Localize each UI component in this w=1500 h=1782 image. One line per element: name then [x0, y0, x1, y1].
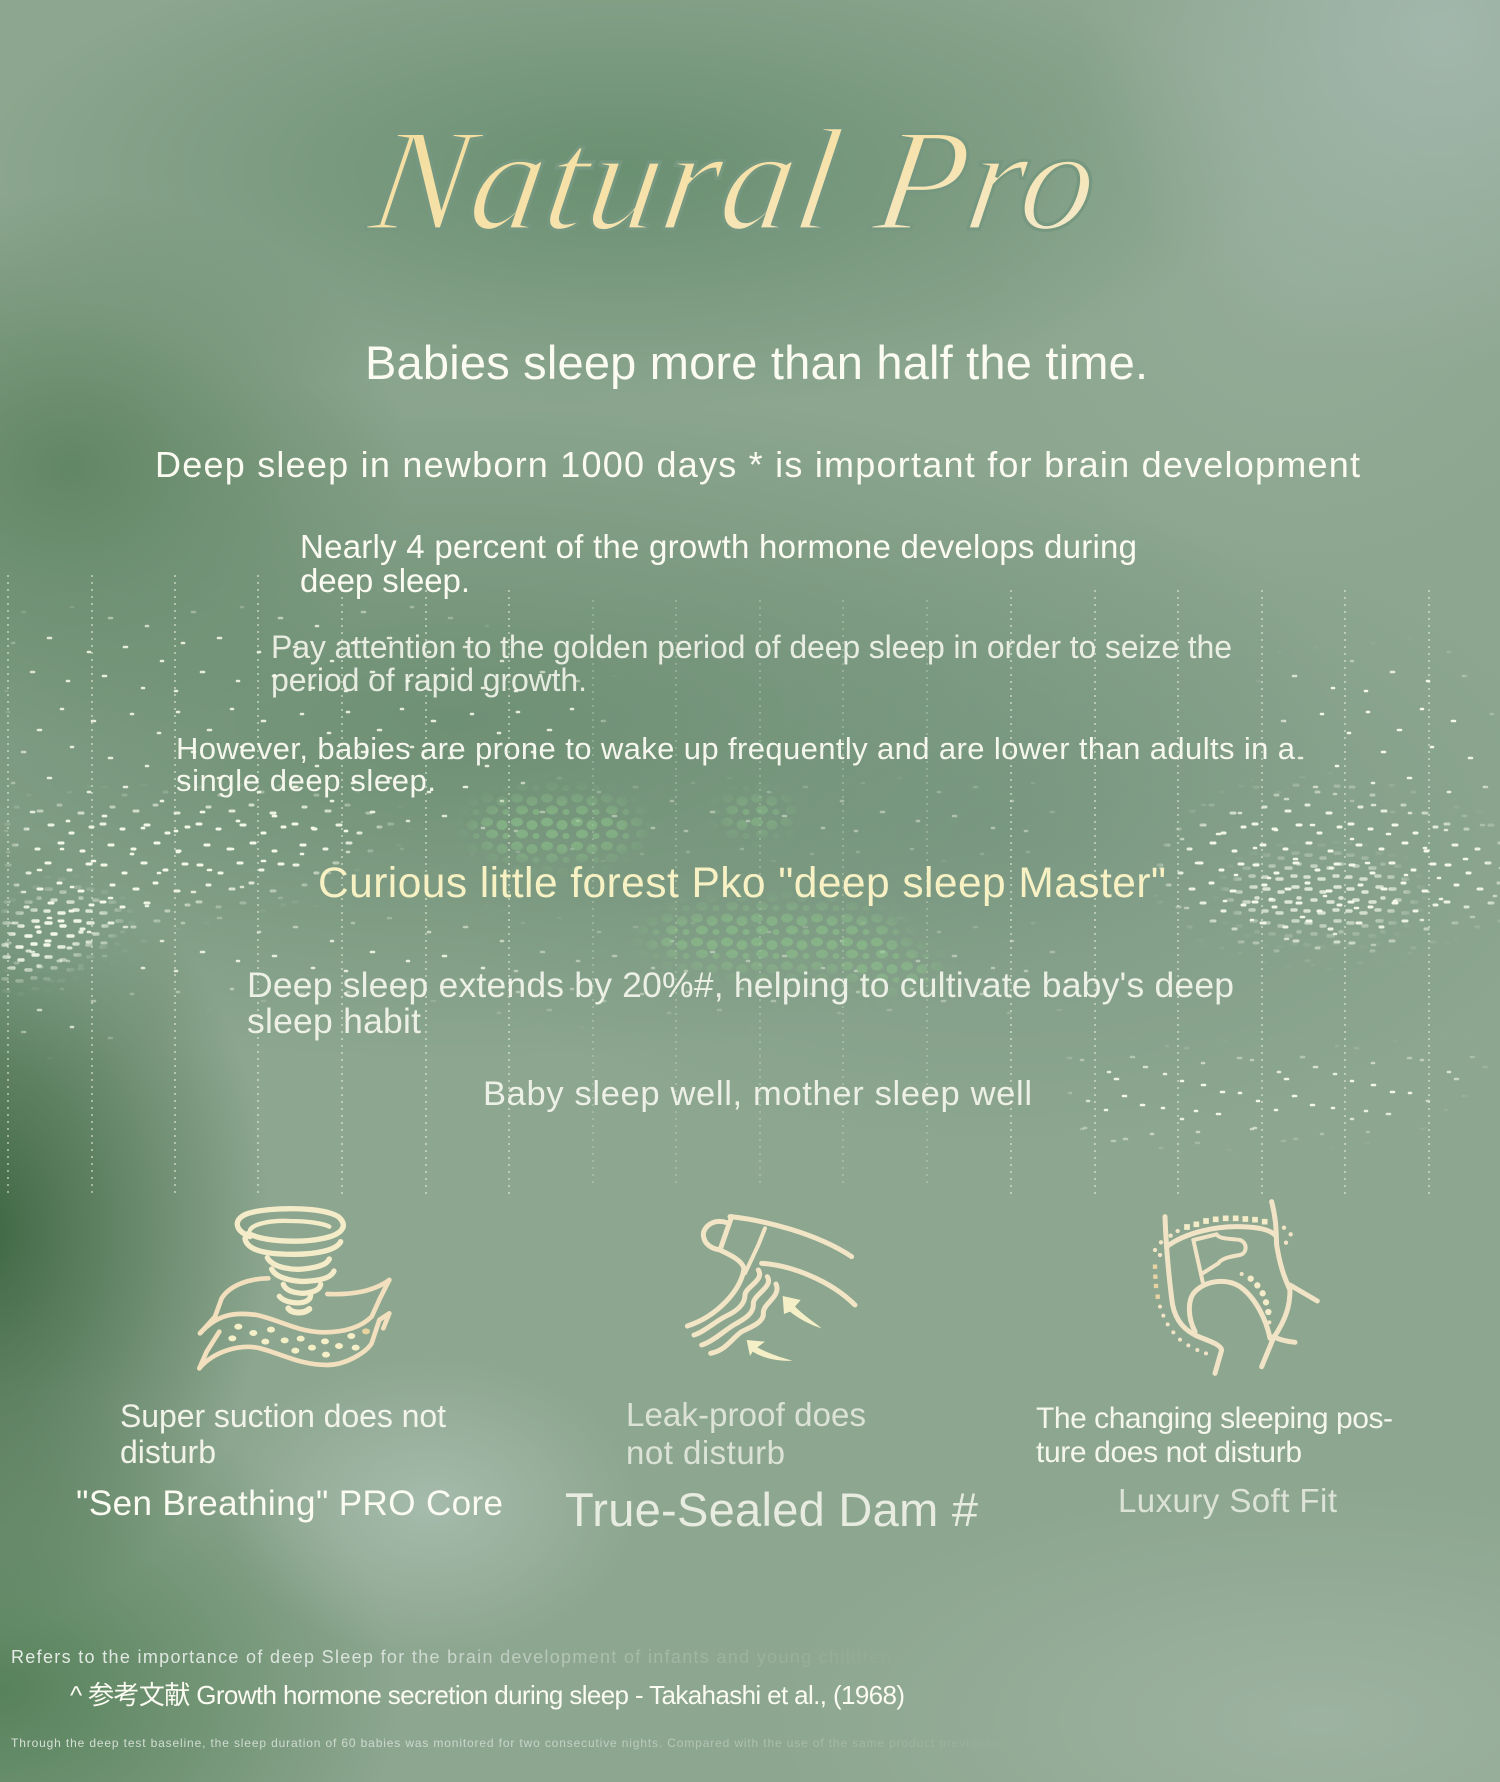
text block: golden period: period of rapid growth.: [271, 662, 587, 698]
text block: deep sleep extends: [247, 965, 1234, 1041]
text block: baby sleep well: Baby sleep well, mother sleep well: [483, 1075, 1032, 1113]
caption: true-sealed dam: True-Sealed Dam #: [565, 1483, 978, 1536]
text block: babies wake: single deep sleep.: [176, 763, 436, 798]
text block: golden period: [271, 629, 1232, 698]
heading: babies sleep: Babies sleep more than half the time.: [365, 336, 1148, 389]
icon: tornado over absorbent core: [199, 1209, 389, 1368]
decorative green leaf speckles: [469, 794, 936, 988]
caption: leak-proof: Leak-proof does: [626, 1396, 866, 1433]
footnote: small print: Through the deep test baseline, the sleep duration of 60 babies was monitored for two consecutive nights. Compared with the use of the same product previously: [11, 1736, 1001, 1750]
icon: leak-proof dam: [687, 1217, 855, 1361]
footnote: importance of deep sleep: Refers to the importance of deep Sleep for the brain development of infants and young children: [11, 1647, 891, 1667]
title: Natural Pro: Natural Pro: [359, 99, 1109, 261]
text block: deep sleep extends: Deep sleep extends by 20%#, helping to cultivate baby's deep: [247, 965, 1234, 1005]
text block: babies wake: However, babies are prone to wake up frequently and are lower than adults in a: [176, 731, 1296, 766]
text block: deep sleep extends: sleep habit: [247, 1001, 421, 1041]
caption: luxury soft fit: Luxury Soft Fit: [1118, 1482, 1337, 1519]
caption: super suction: [120, 1398, 446, 1470]
text block: growth hormone: [300, 528, 1137, 599]
caption: changing sleeping posture: [1036, 1402, 1393, 1469]
heading: deep sleep master: Curious little forest Pko "deep sleep Master": [318, 860, 1166, 907]
caption: sen breathing pro core: "Sen Breathing" PRO Core: [76, 1484, 503, 1523]
decorative dotted vertical lines: [8, 575, 1429, 1195]
caption: leak-proof: [626, 1396, 866, 1471]
footnote: reference: ^ 参考文献 Growth hormone secretion during sleep - Takahashi et al., (1968): [70, 1680, 905, 1710]
caption: changing sleeping posture: The changing sleeping pos-: [1036, 1402, 1393, 1435]
caption: leak-proof: not disturb: [626, 1434, 785, 1471]
caption: changing sleeping posture: ture does not disturb: [1036, 1436, 1302, 1469]
text block: growth hormone: Nearly 4 percent of the growth hormone develops during: [300, 528, 1137, 565]
caption: super suction: Super suction does not: [120, 1398, 446, 1434]
text block: golden period: Pay attention to the golden period of deep sleep in order to seize the: [271, 629, 1232, 665]
subheading: deep sleep in newborn: Deep sleep in newborn 1000 days * is important for brain development: [155, 444, 1360, 485]
decorative particle clouds: [1, 606, 1500, 1149]
text block: babies wake: [176, 731, 1296, 798]
text block: growth hormone: deep sleep.: [300, 562, 470, 599]
caption: super suction: disturb: [120, 1434, 216, 1470]
icon: soft fit diaper: [1155, 1202, 1317, 1373]
